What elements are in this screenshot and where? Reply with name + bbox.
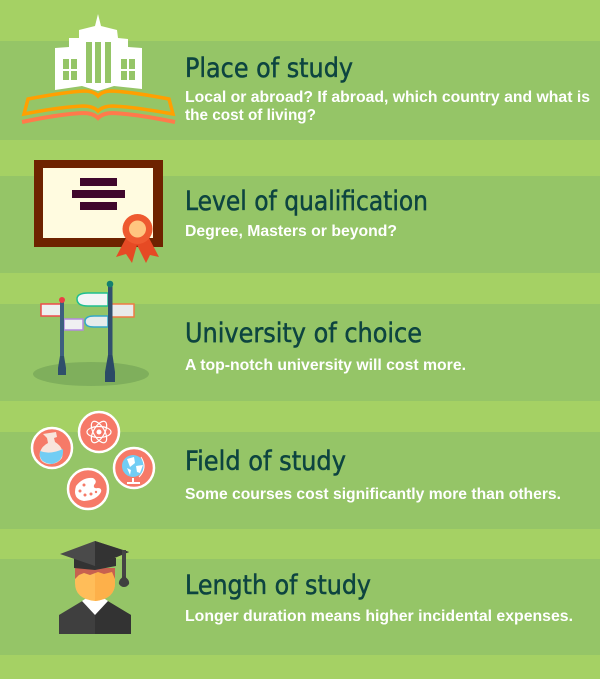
text: length of study description: Longer duration means higher incidental expenses. [185,608,573,625]
text: level of qualification description: Degree, Masters or beyond? [185,223,397,240]
text: university of choice description: A top-notch university will cost more. [185,357,466,374]
icon: graduate with cap [59,541,131,634]
heading: place of study: Place of study [185,53,353,84]
text: place of study description: the cost of living? [185,107,316,124]
icon: atom badge [79,412,119,452]
text: place of study description: Local or abroad? If abroad, which country and what is [185,89,590,106]
icon: globe badge [114,448,154,488]
icon: university building on open book [22,14,175,122]
icon: framed certificate with ribbon [34,160,163,263]
text: field of study description: Some courses cost significantly more than others. [185,486,561,503]
heading: level of qualification: Level of qualification [185,186,428,217]
heading: field of study: Field of study [185,446,346,477]
icon: study field badges [32,412,154,509]
icon: flask badge [32,428,72,468]
icon: palette badge [68,469,108,509]
icon: signposts [33,281,149,386]
heading: length of study: Length of study [185,570,371,601]
heading: university of choice: University of choice [185,318,422,349]
